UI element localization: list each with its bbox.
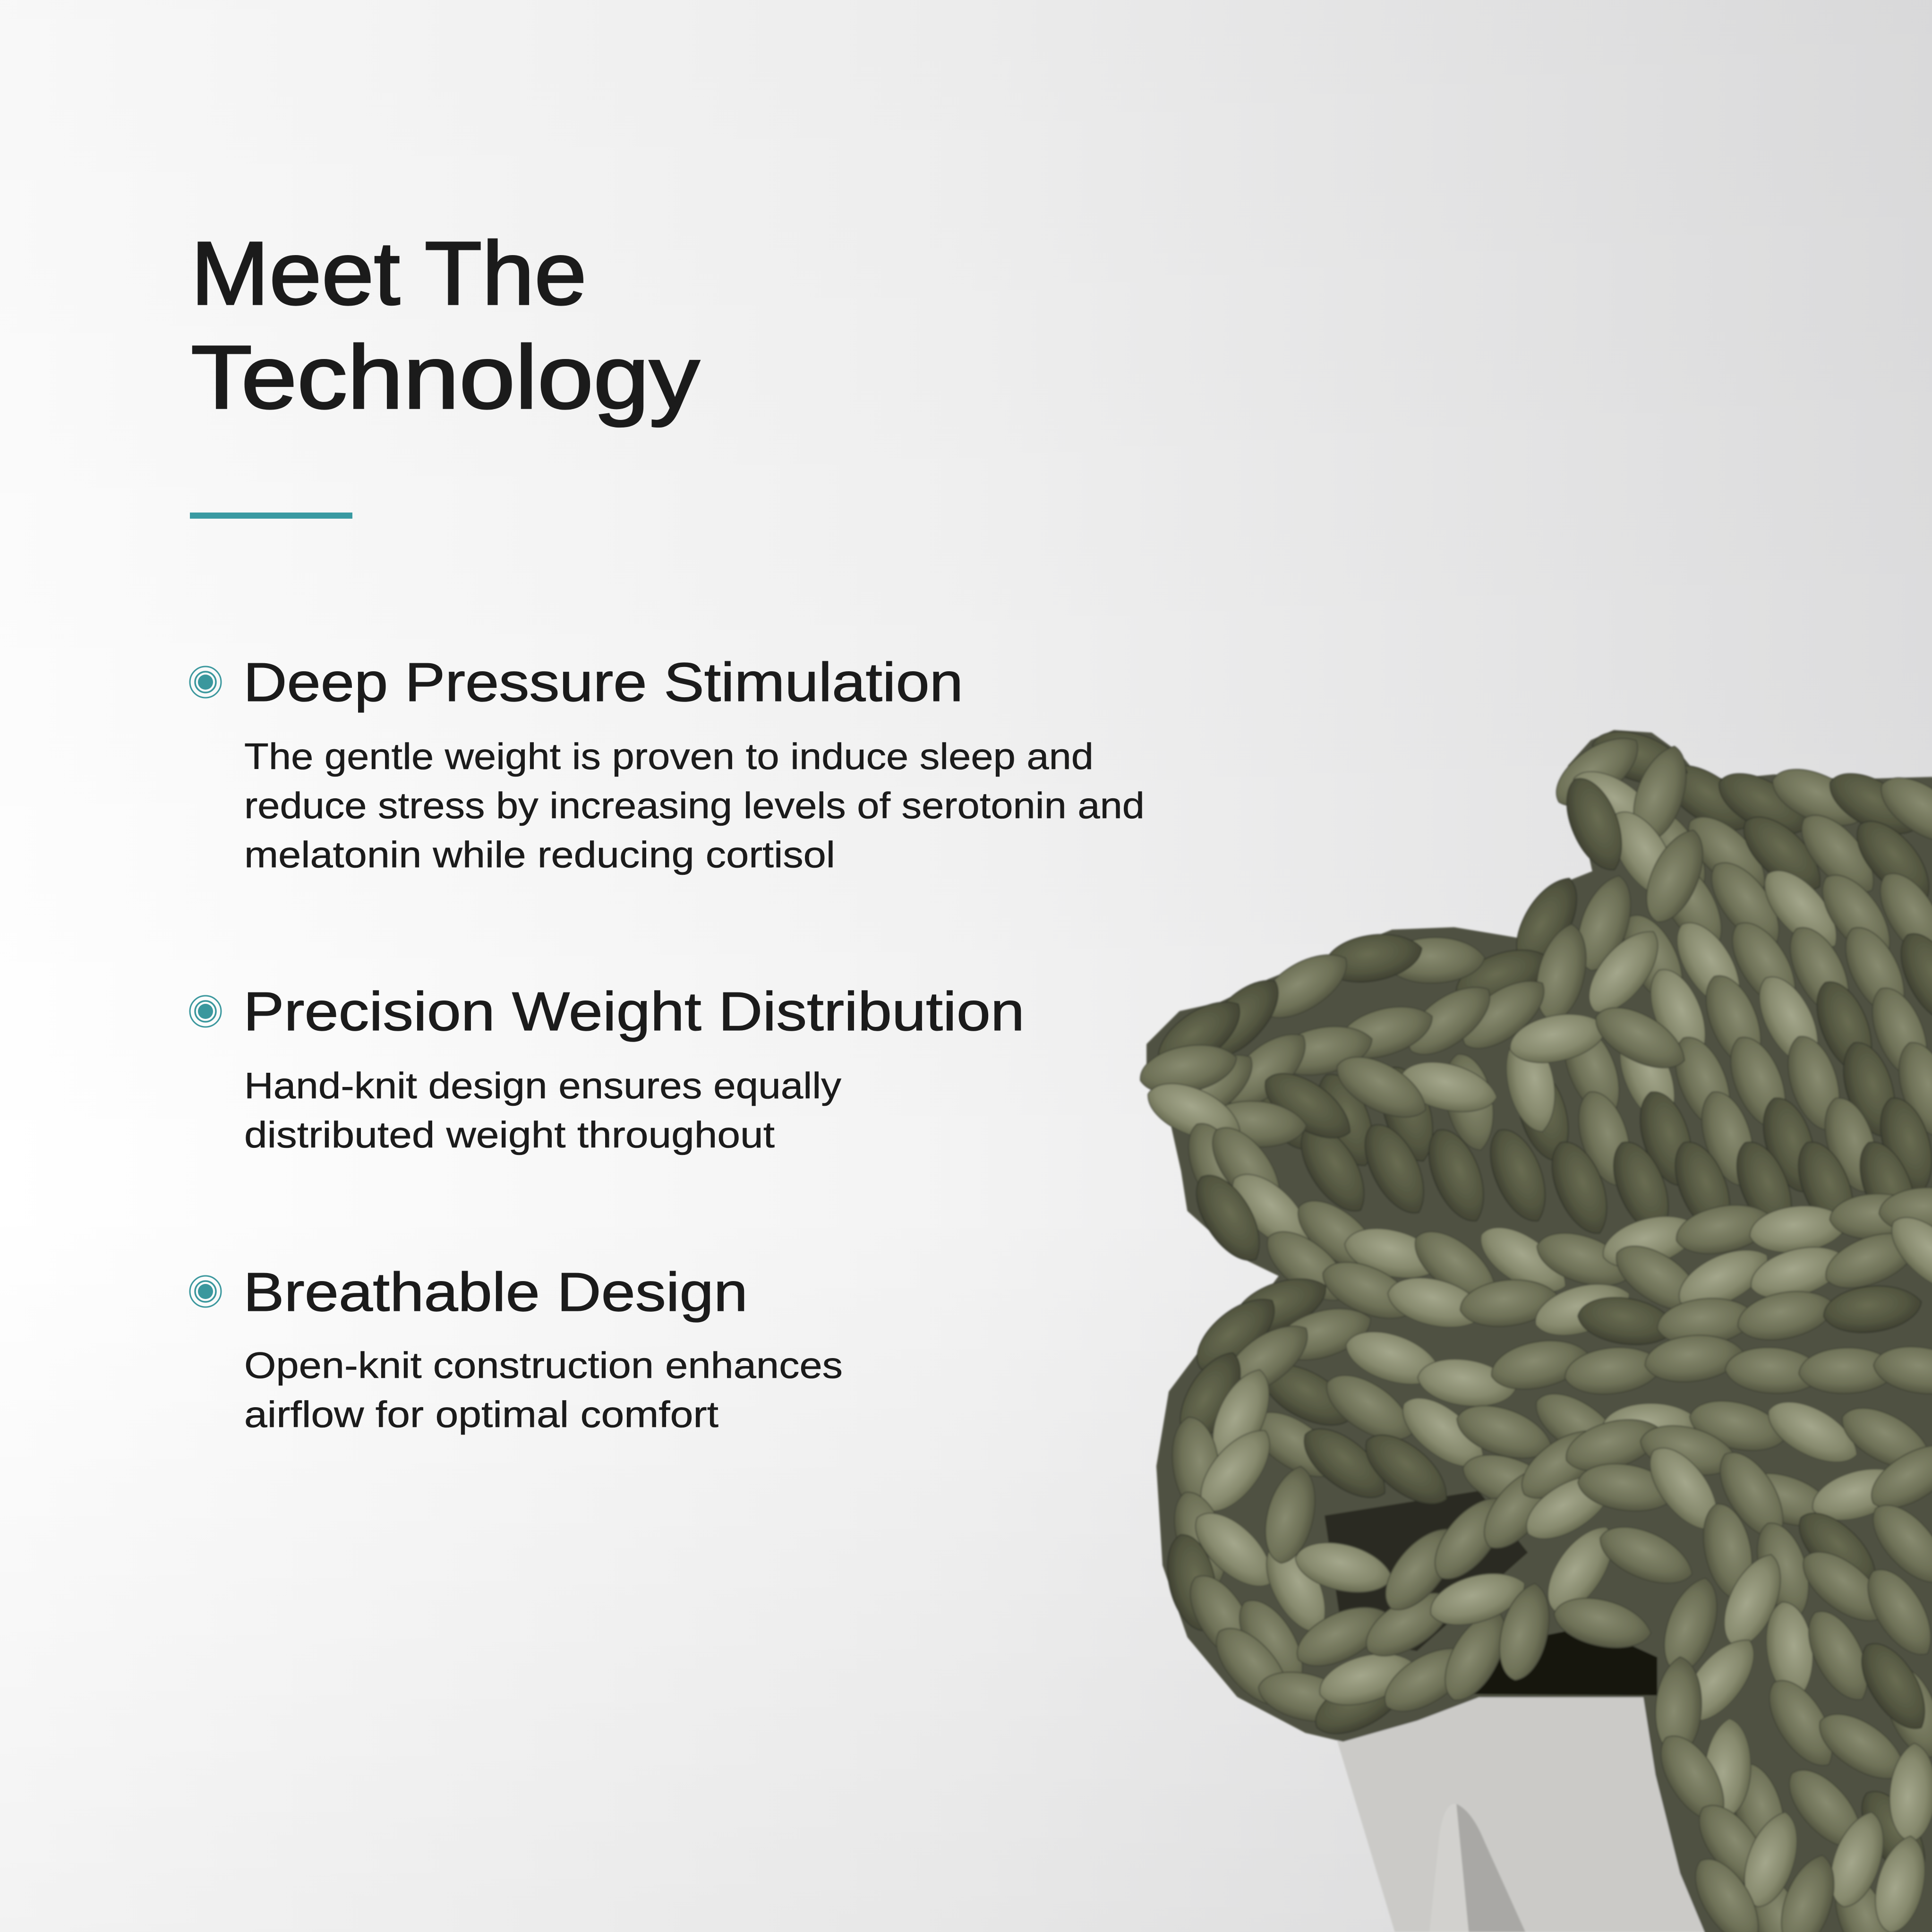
body text: melatonin while reducing cortisol [244, 834, 835, 875]
body text: distributed weight throughout [244, 1114, 775, 1155]
heading: Precision Weight Distribution [243, 981, 1025, 1042]
body text [244, 1065, 841, 1155]
title [191, 223, 700, 427]
lower blanket braids [1161, 1267, 1932, 1745]
feature: Deep Pressure Stimulation [190, 651, 1145, 875]
heading: Breathable Design [243, 1261, 748, 1323]
body text [244, 735, 1145, 875]
body text: Hand-knit design ensures equally [244, 1065, 841, 1106]
stone stand [1337, 1688, 1725, 1932]
body text [244, 1344, 843, 1435]
icon: target bullet [190, 1276, 221, 1307]
front loop braid [1470, 1410, 1932, 1932]
title: Technology [191, 327, 700, 427]
icon: target bullet [190, 996, 221, 1027]
feature: Breathable Design [190, 1261, 843, 1435]
upper ridge braid [1136, 868, 1694, 1154]
body text: airflow for optimal comfort [244, 1393, 718, 1435]
product image: knit blanket on stone stand [1136, 720, 1932, 1932]
body text: The gentle weight is proven to induce sleep and [244, 735, 1094, 777]
dark cavities [1325, 1491, 1657, 1695]
icon: target bullet [190, 667, 221, 698]
heading: Deep Pressure Stimulation [243, 651, 963, 713]
blanket silhouette [1148, 732, 1932, 1932]
front lip braid [1178, 1115, 1932, 1352]
feature: Precision Weight Distribution [190, 981, 1025, 1155]
body text: reduce stress by increasing levels of serotonin and [244, 785, 1145, 826]
title: Meet The [191, 223, 587, 324]
top corner braid [1544, 720, 1717, 977]
body text: Open-knit construction enhances [244, 1344, 843, 1386]
back knit rows [1240, 752, 1932, 1242]
title accent rule [190, 513, 352, 519]
